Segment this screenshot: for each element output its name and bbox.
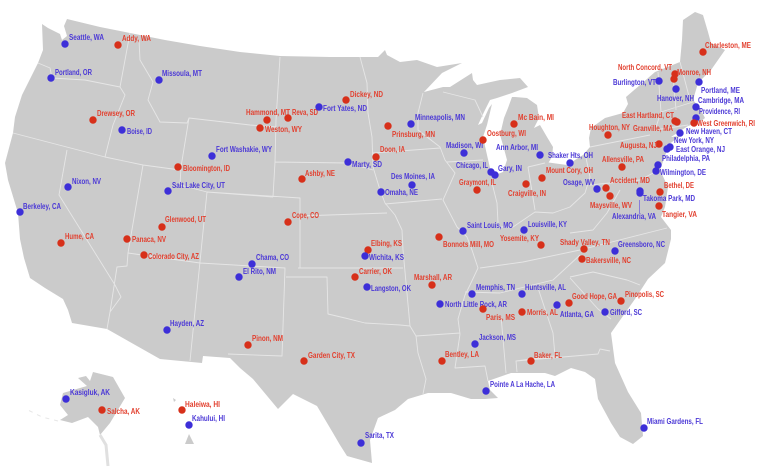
- Osage, WV: [563, 177, 601, 193]
- Bloomington, ID: Bloomington, ID: [183, 163, 230, 173]
- Accident, MD: Accident, MD: [610, 175, 650, 185]
- Gary, IN: Gary, IN: [498, 163, 522, 173]
- Prinsburg, MN: [384, 122, 435, 139]
- Marshall, AR: Marshall, AR: [414, 272, 453, 282]
- Bonnots Mill, MO: Bonnots Mill, MO: [443, 239, 494, 249]
- Maysville, WV: Maysville, WV: [590, 200, 632, 210]
- Bethel, DE: Bethel, DE: [664, 180, 694, 190]
- Glenwood, UT: Glenwood, UT: [165, 214, 207, 224]
- New Haven, CT: [676, 126, 733, 137]
- Haleiwa, HI: Haleiwa, HI: [185, 399, 220, 409]
- Langston, OK: [363, 283, 412, 293]
- Sarita, TX: [357, 430, 394, 447]
- Charleston, ME: [699, 40, 751, 56]
- Portland, ME: [695, 78, 740, 95]
- Alexandria, VA: [612, 189, 656, 221]
- Yosemite, KY: [500, 233, 545, 249]
- Bakersville, NC: [578, 255, 631, 265]
- Hayden, AZ: Hayden, AZ: [170, 318, 204, 328]
- Prinsburg, MN: Prinsburg, MN: [392, 129, 435, 139]
- Philadelphia, PA: [654, 153, 710, 169]
- Panaca, NV: [123, 234, 166, 244]
- Paris, MS: Paris, MS: [486, 312, 515, 322]
- Doon, IA: [372, 144, 405, 161]
- Minneapolis, MN: Minneapolis, MN: [415, 112, 465, 122]
- Reva, SD: [284, 107, 318, 122]
- Pinopolis, SC: [617, 289, 664, 305]
- Dickey, ND: Dickey, ND: [350, 89, 383, 99]
- Burlington, VT: Burlington, VT: [613, 77, 657, 87]
- Dickey, ND: [342, 89, 383, 104]
- Bentley, LA: [438, 349, 479, 365]
- Panaca, NV: Panaca, NV: [132, 234, 166, 244]
- New York, NY: [666, 135, 714, 151]
- Portland, OR: Portland, OR: [55, 67, 93, 77]
- Hume, CA: Hume, CA: [65, 231, 94, 241]
- El Rito, NM: [235, 266, 276, 281]
- Gifford, SC: Gifford, SC: [610, 307, 642, 317]
- Baker, FL: Baker, FL: [534, 350, 562, 360]
- Monroe, NH: Monroe, NH: [677, 67, 711, 77]
- Shady Valley, TN: [560, 237, 610, 253]
- Langston, OK: Langston, OK: [371, 283, 412, 293]
- Memphis, TN: [468, 282, 515, 298]
- Missoula, MT: [155, 68, 203, 84]
- Bloomington, ID: [174, 163, 230, 173]
- Granville, MA: Granville, MA: [633, 123, 673, 133]
- Osage, WV: Osage, WV: [563, 177, 595, 187]
- Atlanta, GA: Atlanta, GA: [560, 309, 594, 319]
- Good Hope, GA: Good Hope, GA: [572, 291, 617, 301]
- Miami Gardens, FL: [640, 416, 703, 432]
- Hanover, NH: [657, 85, 694, 103]
- Portland, ME: Portland, ME: [701, 85, 740, 95]
- Weston, WY: [256, 124, 302, 134]
- Berkeley, CA: [16, 201, 61, 216]
- New York, NY: New York, NY: [674, 135, 714, 145]
- Pinopolis, SC: Pinopolis, SC: [625, 289, 664, 299]
- Addy, WA: Addy, WA: [122, 33, 151, 43]
- Greensboro, NC: Greensboro, NC: [618, 239, 665, 249]
- Kasigluk, AK: Kasigluk, AK: [70, 387, 111, 397]
- Monroe, NH: [670, 67, 711, 83]
- North Little Rock, AR: [436, 299, 508, 309]
- Des Moines, IA: Des Moines, IA: [391, 171, 435, 181]
- Saint Louis, MO: Saint Louis, MO: [467, 220, 513, 230]
- Berkeley, CA: Berkeley, CA: [23, 201, 61, 211]
- East Hartland, CT: [622, 110, 679, 125]
- Omaha, NE: [377, 187, 418, 197]
- Graymont, IL: Graymont, IL: [459, 177, 496, 187]
- Mc Bain, MI: [510, 112, 554, 128]
- Salcha, AK: Salcha, AK: [107, 406, 141, 416]
- Garden City, TX: Garden City, TX: [308, 350, 355, 360]
- Providence, RI: Providence, RI: [699, 106, 740, 116]
- Shady Valley, TN: Shady Valley, TN: [560, 237, 610, 247]
- Louisville, KY: Louisville, KY: [528, 219, 567, 229]
- Mount Cory, OH: [538, 165, 593, 182]
- Saint Louis, MO: [459, 220, 513, 235]
- Weston, WY: Weston, WY: [265, 124, 302, 134]
- Marty, SD: [344, 158, 382, 169]
- Missoula, MT: Missoula, MT: [162, 68, 203, 78]
- Fort Yates, ND: [315, 103, 367, 113]
- Hammond, MT: Hammond, MT: [246, 107, 291, 117]
- Kahului, HI: [185, 413, 225, 429]
- El Rito, NM: El Rito, NM: [243, 266, 276, 276]
- map: Hawaii: [173, 398, 194, 444]
- Bethel, DE: [656, 180, 694, 196]
- Morris, AL: Morris, AL: [527, 307, 558, 317]
- Salt Lake City, UT: Salt Lake City, UT: [172, 180, 226, 190]
- Good Hope, GA: [565, 291, 617, 307]
- Tangier, VA: Tangier, VA: [662, 209, 697, 219]
- Hanover, NH: Hanover, NH: [657, 93, 694, 103]
- Nixon, NV: Nixon, NV: [72, 176, 101, 186]
- Craigville, IN: [508, 180, 546, 198]
- Minneapolis, MN: [407, 112, 465, 128]
- Chama, CO: Chama, CO: [256, 252, 289, 262]
- map: Alaska: [28, 372, 125, 466]
- Huntsville, AL: [518, 282, 566, 298]
- Takoma Park, MD: Takoma Park, MD: [643, 193, 695, 203]
- Hayden, AZ: [163, 318, 204, 334]
- Elbing, KS: [364, 238, 402, 254]
- Paris, MS: [479, 305, 515, 322]
- Doon, IA: Doon, IA: [380, 144, 405, 154]
- Salt Lake City, UT: [164, 180, 226, 195]
- Cope, CO: [284, 210, 319, 226]
- East Hartland, CT: East Hartland, CT: [622, 110, 675, 120]
- Morris, AL: [518, 307, 558, 317]
- Jackson, MS: Jackson, MS: [479, 332, 516, 342]
- Ashby, NE: Ashby, NE: [305, 168, 335, 178]
- Oostburg, WI: Oostburg, WI: [487, 128, 526, 138]
- Memphis, TN: Memphis, TN: [476, 282, 515, 292]
- Kahului, HI: Kahului, HI: [192, 413, 225, 423]
- Drewsey, OR: [89, 108, 136, 124]
- Baker, FL: [527, 350, 562, 365]
- Yosemite, KY: Yosemite, KY: [500, 233, 539, 243]
- Wilmington, DE: Wilmington, DE: [660, 167, 706, 177]
- Mount Cory, OH: Mount Cory, OH: [546, 165, 593, 175]
- Graymont, IL: [459, 177, 496, 194]
- Marshall, AR: [414, 272, 453, 289]
- Des Moines, IA: [391, 171, 435, 189]
- Ashby, NE: [298, 168, 335, 183]
- Maysville, WV: [590, 192, 632, 210]
- Chama, CO: [248, 252, 289, 268]
- North Little Rock, AR: North Little Rock, AR: [445, 299, 508, 309]
- Houghton, NY: [589, 122, 630, 139]
- Oostburg, WI: [479, 128, 526, 144]
- Augusta, NJ: Augusta, NJ: [620, 140, 657, 150]
- Sarita, TX: Sarita, TX: [365, 430, 394, 440]
- Hume, CA: [57, 231, 94, 247]
- East Orange, NJ: East Orange, NJ: [676, 144, 725, 154]
- Philadelphia, PA: Philadelphia, PA: [662, 153, 710, 163]
- Marty, SD: Marty, SD: [352, 159, 382, 169]
- Greensboro, NC: [611, 239, 665, 255]
- Allensville, PA: [602, 154, 644, 171]
- Kasigluk, AK: [62, 387, 111, 403]
- Craigville, IN: Craigville, IN: [508, 188, 546, 198]
- Garden City, TX: [300, 350, 355, 365]
- Tangier, VA: [655, 202, 697, 219]
- Wichita, KS: [361, 252, 404, 262]
- Alexandria, VA: Alexandria, VA: [612, 211, 656, 221]
- Salcha, AK: [98, 406, 141, 416]
- Colorado City, AZ: [140, 251, 199, 261]
- Nixon, NV: [64, 176, 101, 191]
- Hammond, MT: [246, 107, 291, 124]
- Colorado City, AZ: Colorado City, AZ: [148, 251, 199, 261]
- Gary, IN: [491, 163, 522, 179]
- Miami Gardens, FL: Miami Gardens, FL: [647, 416, 703, 426]
- Pointe A La Hache, LA: Pointe A La Hache, LA: [490, 379, 555, 389]
- Wichita, KS: Wichita, KS: [369, 252, 404, 262]
- Shaker Hts, OH: Shaker Hts, OH: [548, 150, 593, 160]
- North Concord, VT: [618, 62, 679, 78]
- Takoma Park, MD: [636, 187, 695, 203]
- North Concord, VT: North Concord, VT: [618, 62, 673, 72]
- Addy, WA: [114, 33, 151, 49]
- Madison, WI: [446, 140, 483, 157]
- Omaha, NE: Omaha, NE: [385, 187, 418, 197]
- Boise, ID: Boise, ID: [127, 126, 152, 136]
- Houghton, NY: Houghton, NY: [589, 122, 630, 132]
- Gifford, SC: [601, 307, 642, 317]
- Pointe A La Hache, LA: [482, 379, 555, 395]
- Chicago, IL: Chicago, IL: [456, 160, 488, 170]
- Louisville, KY: [520, 219, 567, 234]
- Elbing, KS: Elbing, KS: [371, 238, 402, 248]
- Ann Arbor, MI: Ann Arbor, MI: [496, 142, 538, 152]
- Seattle, WA: Seattle, WA: [69, 32, 104, 42]
- Chicago, IL: [456, 160, 495, 176]
- New Haven, CT: New Haven, CT: [686, 126, 733, 136]
- Portland, OR: [47, 67, 93, 82]
- Glenwood, UT: [158, 214, 207, 231]
- Fort Washakie, WY: [208, 144, 272, 160]
- Wilmington, DE: [652, 167, 706, 177]
- Bakersville, NC: Bakersville, NC: [586, 255, 631, 265]
- Allensville, PA: Allensville, PA: [602, 154, 644, 164]
- Pinon, NM: [244, 333, 283, 349]
- Bonnots Mill, MO: [435, 233, 494, 249]
- East Orange, NJ: [663, 144, 725, 154]
- Reva, SD: Reva, SD: [292, 107, 318, 117]
- Shaker Hts, OH: [548, 150, 593, 167]
- Ann Arbor, MI: [496, 142, 544, 159]
- Bentley, LA: Bentley, LA: [445, 349, 479, 359]
- Boise, ID: [118, 126, 152, 136]
- Atlanta, GA: [553, 301, 594, 319]
- Accident, MD: [602, 175, 650, 192]
- Cambridge, MA: [692, 95, 744, 111]
- Carrier, OK: [351, 266, 393, 281]
- Providence, RI: [692, 106, 740, 122]
- Fort Yates, ND: Fort Yates, ND: [323, 103, 367, 113]
- Jackson, MS: [471, 332, 516, 348]
- Cope, CO: Cope, CO: [292, 210, 319, 220]
- Madison, WI: Madison, WI: [446, 140, 483, 150]
- Pinon, NM: Pinon, NM: [252, 333, 283, 343]
- Carrier, OK: Carrier, OK: [359, 266, 393, 276]
- Seattle, WA: [61, 32, 104, 48]
- Mc Bain, MI: Mc Bain, MI: [518, 112, 554, 122]
- Drewsey, OR: Drewsey, OR: [97, 108, 136, 118]
- Haleiwa, HI: [178, 399, 220, 414]
- Huntsville, AL: Huntsville, AL: [525, 282, 566, 292]
- Fort Washakie, WY: Fort Washakie, WY: [216, 144, 272, 154]
- Granville, MA: [633, 118, 681, 133]
